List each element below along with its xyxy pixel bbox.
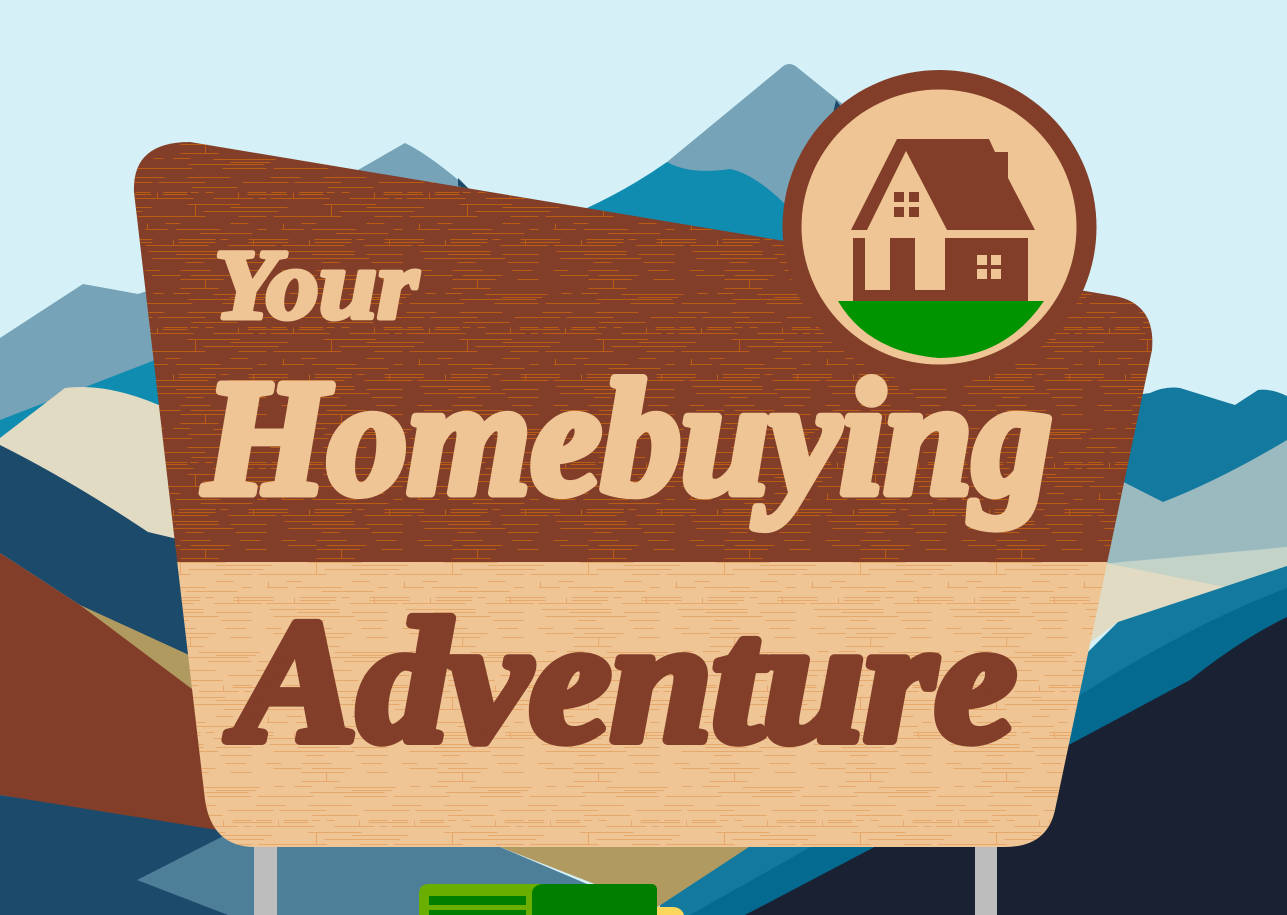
house: walls and door <box>853 238 1028 301</box>
wooden sign <box>120 130 1160 852</box>
house: gable window <box>894 192 919 217</box>
mountains: right cream snowfield <box>1080 562 1225 650</box>
mountains: left brown slope <box>0 553 230 835</box>
truck: trailer <box>419 884 545 915</box>
title: Homebuying: Homebuying <box>202 346 1052 529</box>
mountains: right lower blue band <box>660 566 1287 915</box>
sign board: dark upper plank <box>120 130 1160 562</box>
mountains: left navy slope <box>0 445 220 700</box>
badge: inner disc <box>802 90 1076 364</box>
mountains: bottom-left navy <box>0 795 270 915</box>
mountains: dark navy behind ridge <box>458 100 842 190</box>
mountains: left tan slope <box>80 605 220 720</box>
mountains: right pale slope <box>1100 547 1287 592</box>
truck: headlight <box>657 907 684 915</box>
sign post: left <box>254 840 277 915</box>
mountains: mid teal range <box>0 162 900 520</box>
mountains: dark navy foreground <box>745 617 1287 915</box>
badge: outer ring <box>782 70 1096 384</box>
badge: house in circle <box>782 70 1096 384</box>
truck: cab <box>532 884 657 915</box>
icon: house <box>851 139 1035 301</box>
truck: trailer stripes <box>429 896 526 915</box>
title: Your: Your <box>214 229 419 340</box>
house: roof <box>851 139 1035 230</box>
vehicle: green moving truck top <box>419 884 684 915</box>
mountains: far grey-blue range <box>0 64 900 430</box>
sign board: light lower plank <box>177 562 1108 847</box>
mountains: left cream snowfield <box>0 387 200 560</box>
sign post: right <box>975 840 997 915</box>
mountains: right blue range <box>1100 388 1287 502</box>
title: Adventure: Adventure <box>226 584 1016 779</box>
house: side window <box>977 255 1001 279</box>
mountains: right deep teal band <box>690 588 1287 915</box>
mountains: right grey-green slope <box>1090 420 1287 570</box>
mountains: bottom slate slope <box>137 825 660 915</box>
icon: grass <box>838 301 1044 358</box>
mountains: bottom tan road <box>495 845 752 908</box>
